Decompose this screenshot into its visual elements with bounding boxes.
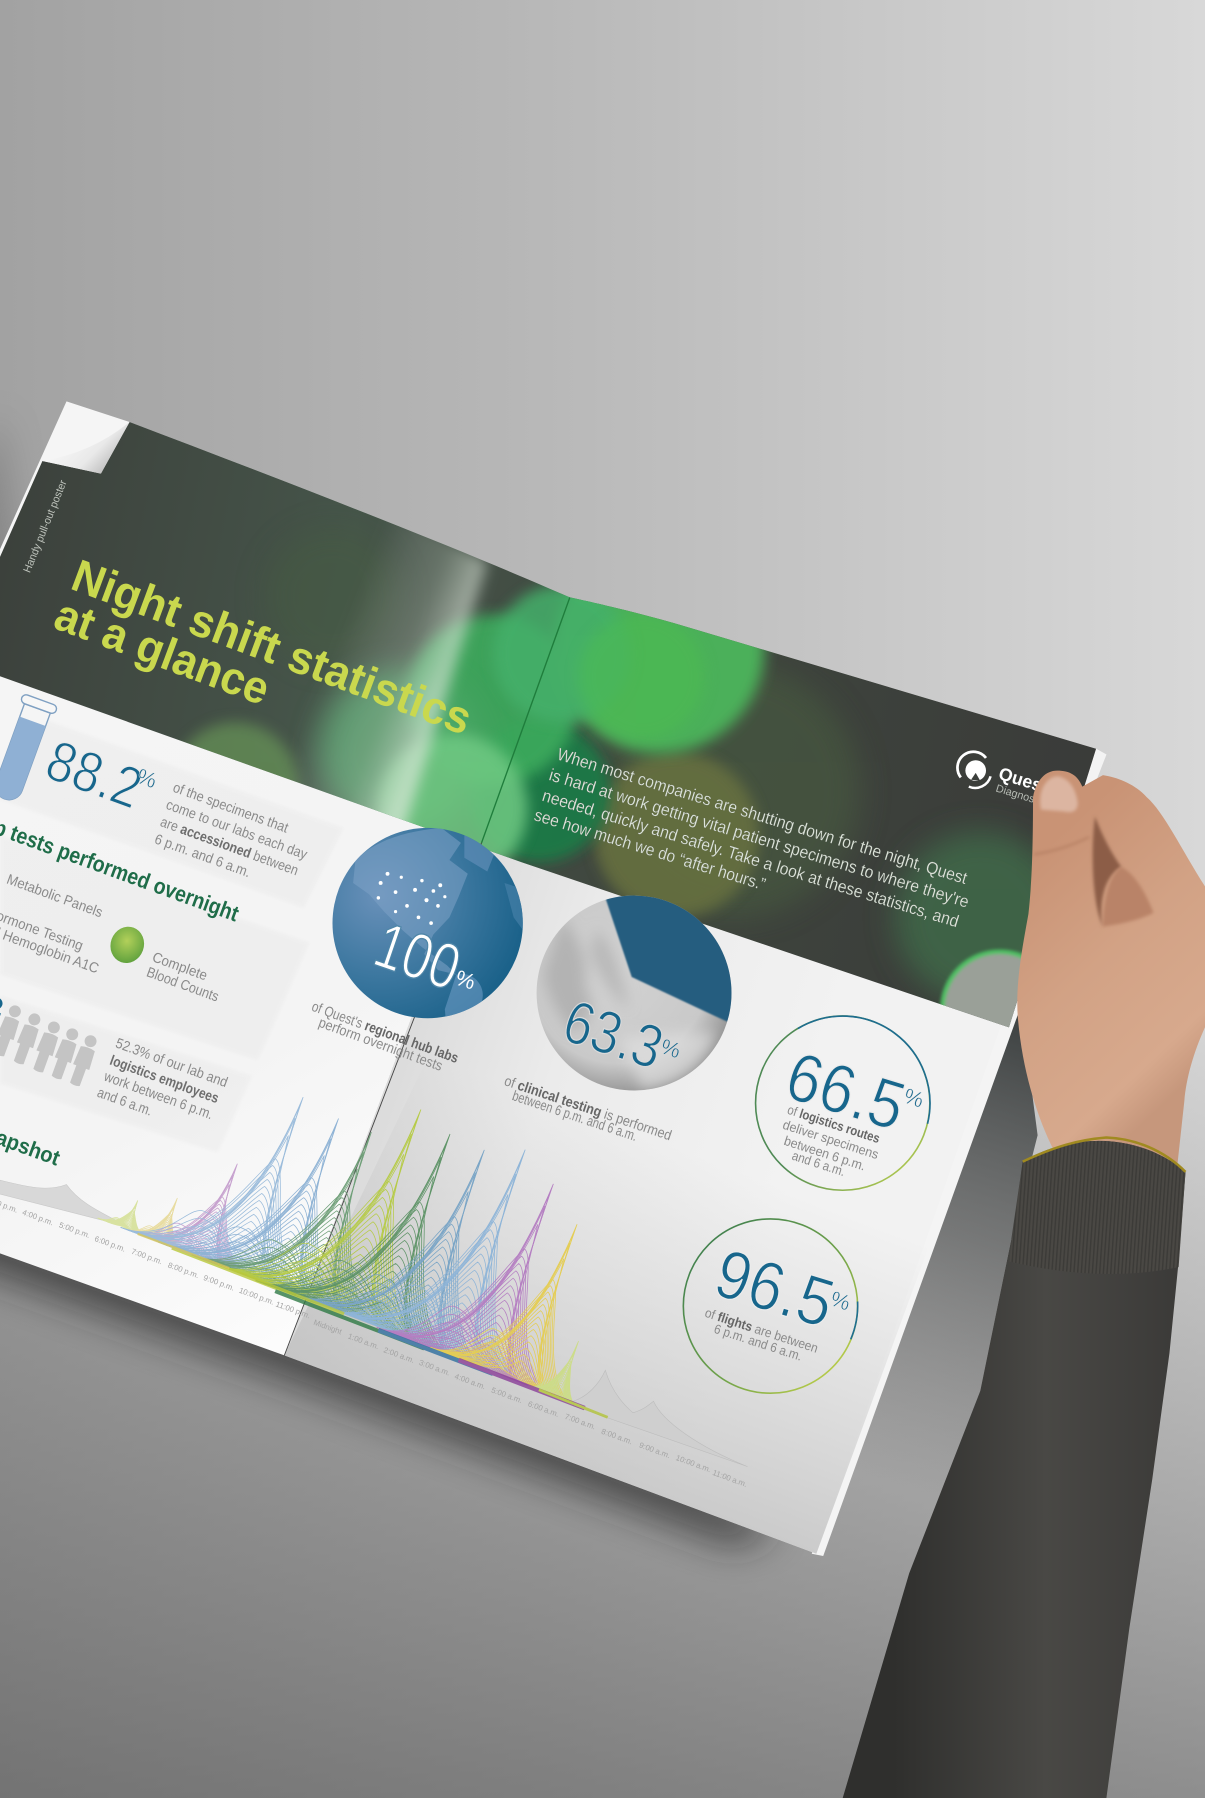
chart time axis labels: 8:00 a.m.	[600, 1427, 634, 1446]
chart time axis labels: 5:00 a.m.	[490, 1385, 524, 1405]
stat: 63.3% moon pie	[536, 896, 732, 1090]
stat: 96.5% ring: of flights are between	[703, 1305, 820, 1356]
stat: 100% globe: %	[452, 965, 479, 995]
stat: 66.5% ring: %	[901, 1083, 927, 1113]
stat: 66.5% ring: deliver specimens	[781, 1117, 881, 1162]
pie wedge	[605, 896, 732, 1022]
icon: people	[0, 995, 101, 1088]
caption: 63.3%: between 6 p.m. and 6 a.m.	[510, 1088, 639, 1145]
finger shadow	[1093, 816, 1121, 927]
stat: 63.3% moon pie: %	[658, 1034, 684, 1063]
stat: 88.2% specimens: of the specimens that	[171, 780, 290, 837]
cuff edge	[1023, 1138, 1186, 1172]
hand	[1017, 771, 1205, 1170]
stat: 66.5% ring: 66.5	[778, 1037, 914, 1145]
stat: 66.5% ring	[756, 1016, 930, 1190]
page curl corner	[42, 422, 130, 474]
caption: 100%: of Quest's regional hub labs	[309, 999, 460, 1067]
caption: 63.3%: of clinical testing is performed	[502, 1073, 674, 1144]
stat: 88.2% specimens: come to our labs each day	[164, 797, 310, 863]
baseline band	[138, 1234, 608, 1417]
left page	[0, 401, 570, 1355]
icon: green ball	[105, 922, 149, 968]
side label: Handy pull-out poster	[21, 478, 70, 574]
stat: 63.3% moon pie: 63.3	[555, 987, 671, 1082]
hand and sleeve	[843, 771, 1205, 1798]
caption: 100%: perform overnight tests	[316, 1015, 445, 1075]
chart time axis labels: 4:00 a.m.	[453, 1372, 487, 1391]
stat: 100% globe: 100	[366, 908, 469, 1004]
chart time axis labels: 9:00 p.m.	[202, 1273, 236, 1293]
chart time axis labels: 6:00 a.m.	[527, 1399, 560, 1419]
continents	[353, 828, 468, 975]
knuckle crease	[1034, 837, 1089, 854]
stat: 96.5% ring: 96.5	[706, 1234, 843, 1343]
stat: 66.5% ring: of logistics routes	[786, 1102, 882, 1146]
chart time axis labels: Midnight	[312, 1318, 344, 1337]
sleeve	[843, 1141, 1186, 1798]
city lights	[377, 872, 446, 925]
right page	[284, 597, 1106, 1554]
intro text: When most companies are shutting down for the night, Quest	[555, 744, 970, 888]
chart time axis labels: 10:00 a.m.	[675, 1453, 712, 1474]
stat: 52.3% employees: and 6 a.m.	[95, 1085, 154, 1120]
panel backgrounds	[0, 717, 344, 1152]
stat: 52.3% employees: 52.3% of our lab and	[113, 1036, 230, 1091]
panel: magazine spread	[0, 390, 1135, 1556]
chart time axis labels: 7:00 p.m.	[130, 1247, 164, 1266]
intro text: is hard at work getting vital patient specimens to where they're	[547, 764, 972, 912]
chart: overnight activity spikes	[0, 1053, 748, 1467]
stat: 88.2% specimens: %	[134, 763, 160, 793]
intro text: see how much we do “after hours.”	[532, 805, 768, 894]
logo: Quest Diagnostics	[957, 752, 1052, 811]
stat: 96.5% ring: %	[827, 1286, 854, 1316]
finger fold	[1103, 867, 1153, 927]
chart time axis labels: 8:00 p.m.	[167, 1261, 200, 1280]
panel: header band	[0, 422, 1096, 1028]
chart time axis labels: 11:00 p.m.	[274, 1299, 312, 1320]
logo: Quest Diagnostics: Quest	[996, 763, 1050, 797]
top tests list: Metabolic Panels	[4, 872, 105, 921]
chart time axis labels: 2:00 a.m.	[382, 1345, 416, 1365]
chart time axis labels	[0, 1195, 748, 1489]
chart time axis labels: 1:00 a.m.	[347, 1332, 380, 1351]
stat: 88.2% specimens	[0, 693, 310, 881]
stat: 52.3% employees: logistics employees	[108, 1053, 221, 1107]
chart time axis labels: 4:00 p.m.	[21, 1208, 55, 1227]
fold line	[482, 597, 570, 843]
stat: 96.5% ring: 6 p.m. and 6 a.m.	[712, 1321, 804, 1364]
grey hills	[0, 1179, 128, 1227]
spike series	[98, 1053, 625, 1403]
chart time axis labels: 10:00 p.m.	[238, 1286, 275, 1307]
chart time axis labels: 11:00 a.m.	[711, 1468, 748, 1489]
stat: 52.3% employees	[0, 995, 230, 1123]
chart time axis labels: 6:00 p.m.	[93, 1234, 127, 1254]
title: at a glance	[48, 588, 277, 715]
top tests list	[0, 872, 221, 1005]
icon: test tube	[0, 693, 58, 805]
stat: 96.5% ring	[683, 1219, 858, 1393]
stat: 66.5% ring: and 6 a.m.	[790, 1148, 847, 1179]
top tests list: Complete	[150, 950, 209, 984]
top tests list: Blood Counts	[144, 965, 221, 1005]
chart time axis labels: 5:00 p.m.	[58, 1220, 91, 1240]
chart time axis labels: 3:00 a.m.	[418, 1358, 451, 1378]
title: Night shift statistics	[65, 549, 479, 745]
cuff ribbing	[1009, 1141, 1186, 1274]
stat: 52.3% employees: work between 6 p.m.	[101, 1069, 215, 1123]
chart time axis labels: 7:00 a.m.	[563, 1412, 597, 1431]
stat: 100% globe	[332, 828, 523, 1018]
chart time axis labels: 9:00 a.m.	[638, 1441, 672, 1460]
logo: Quest Diagnostics: Diagnostics	[994, 783, 1052, 811]
stat: 88.2% specimens: are accessioned between	[158, 814, 300, 879]
stat: 66.5% ring: between 6 p.m.	[782, 1133, 867, 1173]
thumbnail	[1040, 776, 1078, 812]
stat: 88.2% specimens: 6 p.m. and 6 a.m.	[152, 832, 253, 881]
intro text: needed, quickly and safely. Take a look at these statistics, and	[540, 785, 961, 931]
page edge	[1078, 749, 1106, 805]
stat: 88.2% specimens: 88.2	[38, 728, 150, 821]
